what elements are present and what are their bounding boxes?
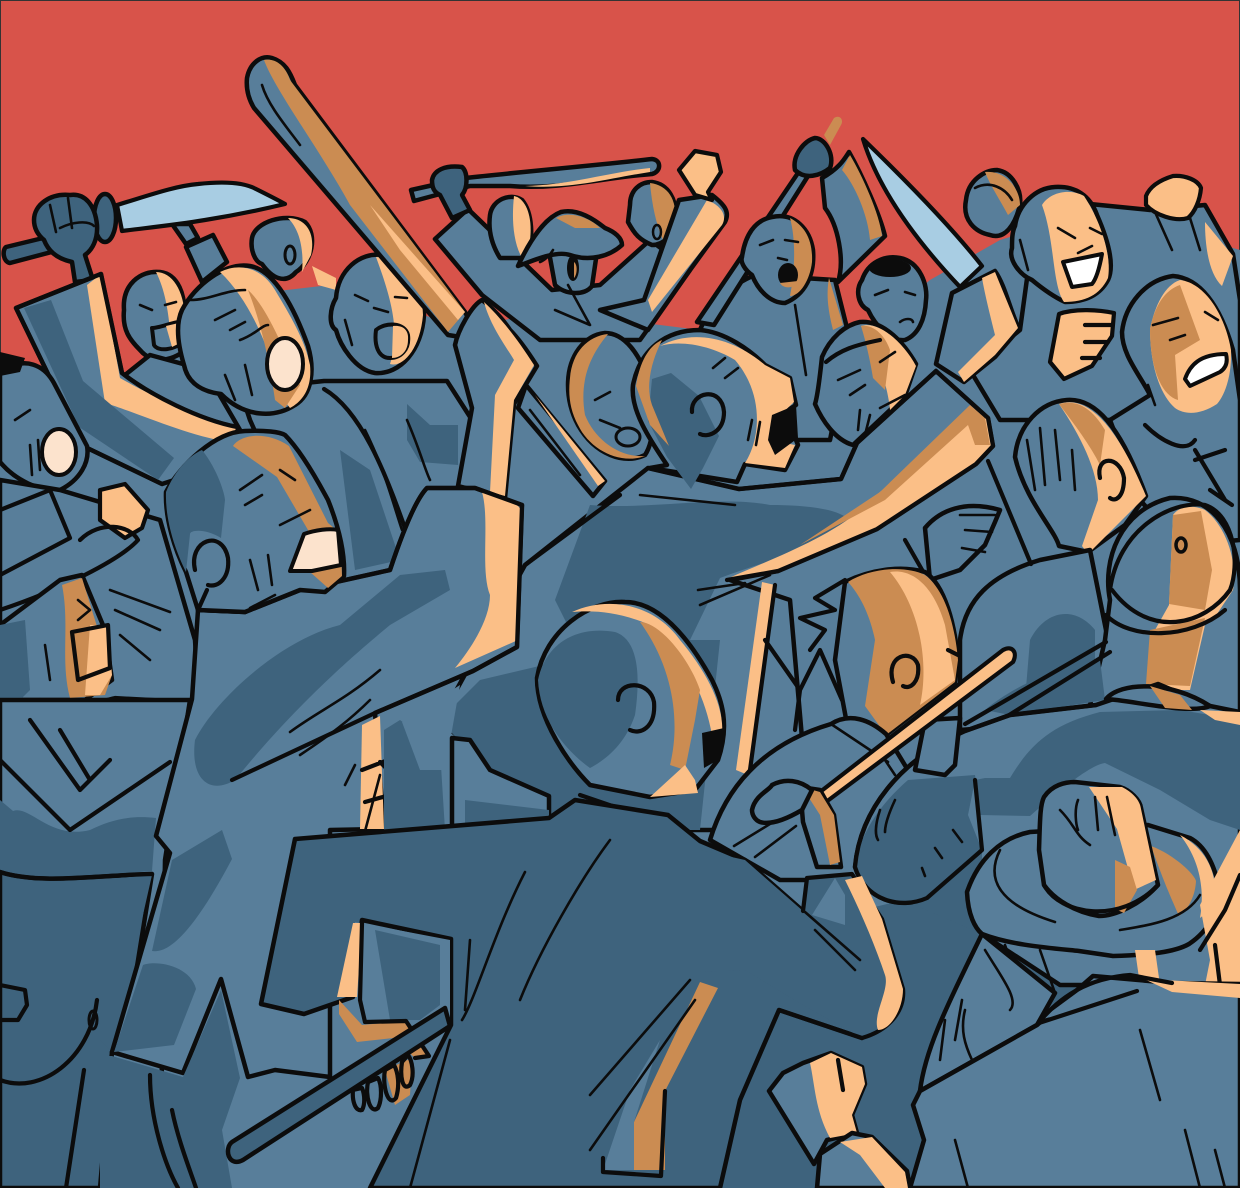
- figure: hand and forearm gripping stick: [734, 781, 841, 867]
- figure: top right shouting man: [970, 176, 1240, 420]
- figure: peach arm right edge: [1135, 830, 1240, 985]
- figure: right arm and sleeve with hat man behind: [700, 684, 1240, 1188]
- weapon: short sword held overhead: [411, 159, 659, 218]
- figure: peach coat strip and lines under arm: [736, 582, 842, 775]
- figure: left edge man screaming: [0, 352, 200, 720]
- figure: robe shadow and folds: [324, 381, 458, 570]
- head: far back right: [965, 170, 1020, 236]
- figure: open hand centre right: [905, 461, 1031, 580]
- figure: far back head and right raised arm: [600, 151, 727, 330]
- figure: bottom right large shoulder: [910, 934, 1240, 1188]
- head: third bald shouting man: [331, 255, 424, 373]
- weapon: giant wooden club: [247, 57, 480, 340]
- figure: hat man bottom right: [967, 782, 1220, 1010]
- figure: short hair man facing right: [800, 569, 958, 740]
- figure: fist at bottom: [769, 1053, 910, 1188]
- figure: raised arm man with big mouth: [16, 266, 312, 484]
- weapon: pickaxe behind sword: [172, 224, 227, 282]
- figure: robe body of shouting men: [240, 381, 480, 600]
- head: man behind centre looking down: [568, 333, 653, 459]
- weapon: large kitchen knife: [863, 139, 982, 287]
- head: man behind with black hair: [858, 257, 926, 340]
- figure: central foreground man with dark coat: [261, 602, 903, 1188]
- figure: hat man centre back: [435, 196, 690, 340]
- figure: left bottom suited man: [0, 700, 190, 1188]
- figure: far right angry man: [1110, 276, 1240, 545]
- figure: big front left man raising arm: [112, 431, 522, 1077]
- figure: hand gripping club and forearm: [455, 300, 605, 498]
- figure: man with long staff: [697, 117, 885, 440]
- head: left back man: [124, 272, 190, 360]
- figure: left back man body: [125, 355, 240, 440]
- weapon: long dark stick behind: [965, 642, 1110, 724]
- figure: far right man with cap seen from back: [1090, 498, 1240, 720]
- figure: man with face in middle right: [815, 271, 1019, 445]
- figure: left cap man shouting: [0, 575, 190, 720]
- figure: middle coat under stick: [710, 718, 920, 880]
- figure: dark trousers under front left coat: [66, 990, 240, 1188]
- weapon: wooden stick diagonal: [820, 648, 1015, 802]
- weapon: top left sword with fist: [4, 183, 285, 282]
- head: small screaming man back left: [252, 218, 336, 290]
- figure: right arm hand on stick: [915, 718, 960, 775]
- figure: back of head man right: [960, 400, 1146, 730]
- figure: arm and club lower left: [228, 923, 450, 1162]
- figure: coat cuff and dark shape behind front man: [384, 685, 549, 830]
- figure: centre right man in back view with raised arm: [440, 330, 993, 830]
